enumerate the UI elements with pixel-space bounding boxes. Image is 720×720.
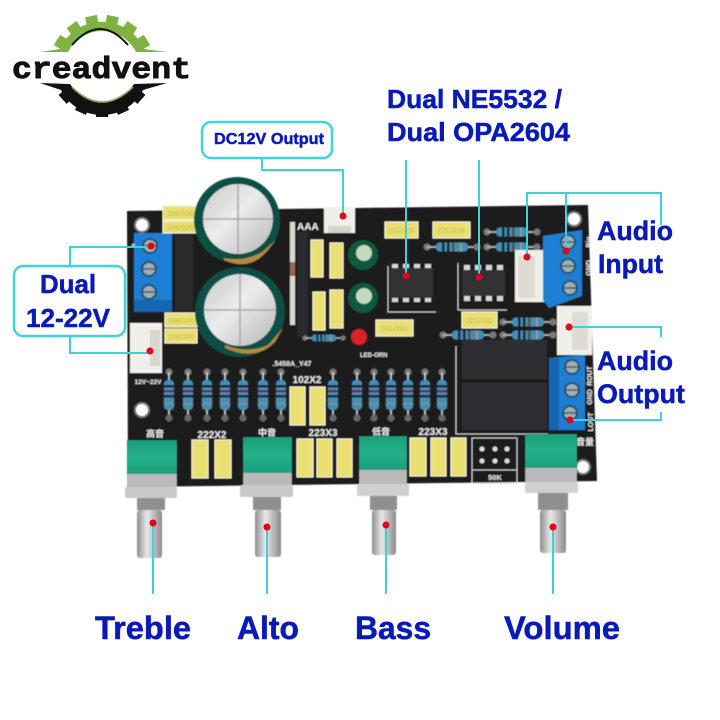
terminal side labels: Rin <box>586 236 593 248</box>
50K header <box>472 438 517 483</box>
yellow capacitors, power section <box>163 206 343 343</box>
regulator block <box>175 235 193 310</box>
op-amp IC 2 <box>458 263 507 310</box>
capacitor group 222X2: 222X2 <box>198 430 227 441</box>
yellow capacitors, preamp section: 221J100 <box>438 228 465 235</box>
electrolytic capacitor bottom <box>195 267 285 357</box>
capacitor group 223X3 bass: 223X3 <box>419 427 448 438</box>
terminal side labels: GND <box>586 260 593 276</box>
left white connector <box>130 323 162 386</box>
mounting holes <box>135 212 590 474</box>
callout: dual 12-22V <box>14 242 154 354</box>
callout: op-amp labels <box>387 84 571 280</box>
potentiometer: alto <box>240 437 293 557</box>
callout: dual 12-22V: 12-22V <box>26 303 111 333</box>
callout: DC12V output <box>202 122 346 220</box>
electrolytic capacitor top <box>194 177 280 264</box>
capacitor group 223X3 mid <box>297 428 352 477</box>
callout: audio input: Audio <box>597 216 673 246</box>
callout: treble: Treble <box>95 610 191 646</box>
callout: audio output: Output <box>597 379 685 409</box>
audio output white connector <box>557 306 592 355</box>
50K header: 50K <box>488 473 502 482</box>
horizontal small resistor <box>302 335 346 341</box>
potentiometer: treble <box>125 440 177 558</box>
callout: dual 12-22V: Dual <box>40 269 96 299</box>
yellow capacitors, power section: 104J100 <box>168 318 195 325</box>
callout: bass: Bass <box>355 610 431 646</box>
op-amp IC 1 <box>388 264 436 312</box>
top white connector <box>324 207 355 233</box>
Chinese silkscreen labels: 高音 <box>146 428 164 439</box>
callout: bass <box>355 522 431 646</box>
relay blocks <box>456 340 548 434</box>
small green capacitors <box>348 240 378 313</box>
red LED: LED-ORN <box>360 353 387 359</box>
callout: audio input <box>524 193 673 279</box>
circuit board <box>127 177 597 487</box>
board substrate <box>127 205 597 487</box>
capacitor group 102X2 <box>290 375 325 425</box>
logo inner arc <box>72 29 128 45</box>
left white connector: 12V~22V <box>135 379 162 386</box>
Chinese silkscreen labels <box>146 426 594 447</box>
resistor row <box>164 368 447 422</box>
callout: DC12V output: DC12V Output <box>214 131 325 148</box>
board code text: .5458A_Y47 <box>273 361 312 368</box>
callout: audio output: Audio <box>597 346 673 376</box>
logo gear top <box>40 15 167 52</box>
yellow capacitors, preamp section: 101J100 <box>381 326 408 333</box>
capacitor group 102X2: 102X2 <box>293 375 322 386</box>
callout: alto: Alto <box>237 610 299 646</box>
logo: creadvent <box>12 15 191 117</box>
callout: op-amp labels: Dual NE5532 / <box>387 84 562 114</box>
callout: op-amp labels: Dual OPA2604 <box>387 117 571 147</box>
yellow capacitors, power section: 104J100 <box>168 334 195 341</box>
yellow capacitors, preamp section: 221J100 <box>466 318 493 325</box>
terminal side labels: LOUT <box>588 412 595 432</box>
callout: treble <box>95 520 191 646</box>
yellow capacitors, preamp section <box>376 222 497 336</box>
red LED <box>351 329 387 359</box>
vertical resistor and AAA marking: AAA <box>297 222 319 233</box>
capacitor group 222X2 <box>192 430 231 478</box>
callout: audio output <box>566 324 685 424</box>
audio input terminal <box>543 230 582 308</box>
vertical resistor and AAA marking <box>290 222 319 337</box>
callout: volume <box>504 524 620 646</box>
terminal side labels: GND <box>587 389 594 405</box>
terminal side labels: ROUT <box>587 365 594 386</box>
yellow capacitors, power section: 104J100 <box>167 225 194 232</box>
callout: audio input: Input <box>598 249 663 279</box>
capacitor group 223X3 mid: 223X3 <box>309 428 338 439</box>
audio input white connector <box>515 250 545 302</box>
terminal side labels: + <box>129 243 136 247</box>
Chinese silkscreen labels: 低音 <box>372 426 390 437</box>
Chinese silkscreen labels: 中音 <box>258 427 276 438</box>
potentiometer: volume <box>525 434 578 553</box>
potentiometer: bass <box>357 436 409 555</box>
callout: volume: Volume <box>504 610 620 646</box>
capacitor group 223X3 bass <box>410 427 466 476</box>
callout: alto <box>237 524 299 646</box>
audio output terminal <box>549 355 585 430</box>
yellow capacitors, preamp section: 101J100 <box>388 228 415 235</box>
left power terminal <box>134 233 172 312</box>
logo gear bottom <box>40 83 167 117</box>
Chinese silkscreen labels: 音量 <box>576 436 594 447</box>
logo lower arc <box>72 87 133 102</box>
logo wordmark: creadvent <box>12 53 191 88</box>
yellow capacitors, power section: 104J100 <box>167 211 194 218</box>
horizontal resistors <box>424 228 556 340</box>
terminal side labels <box>129 236 595 432</box>
